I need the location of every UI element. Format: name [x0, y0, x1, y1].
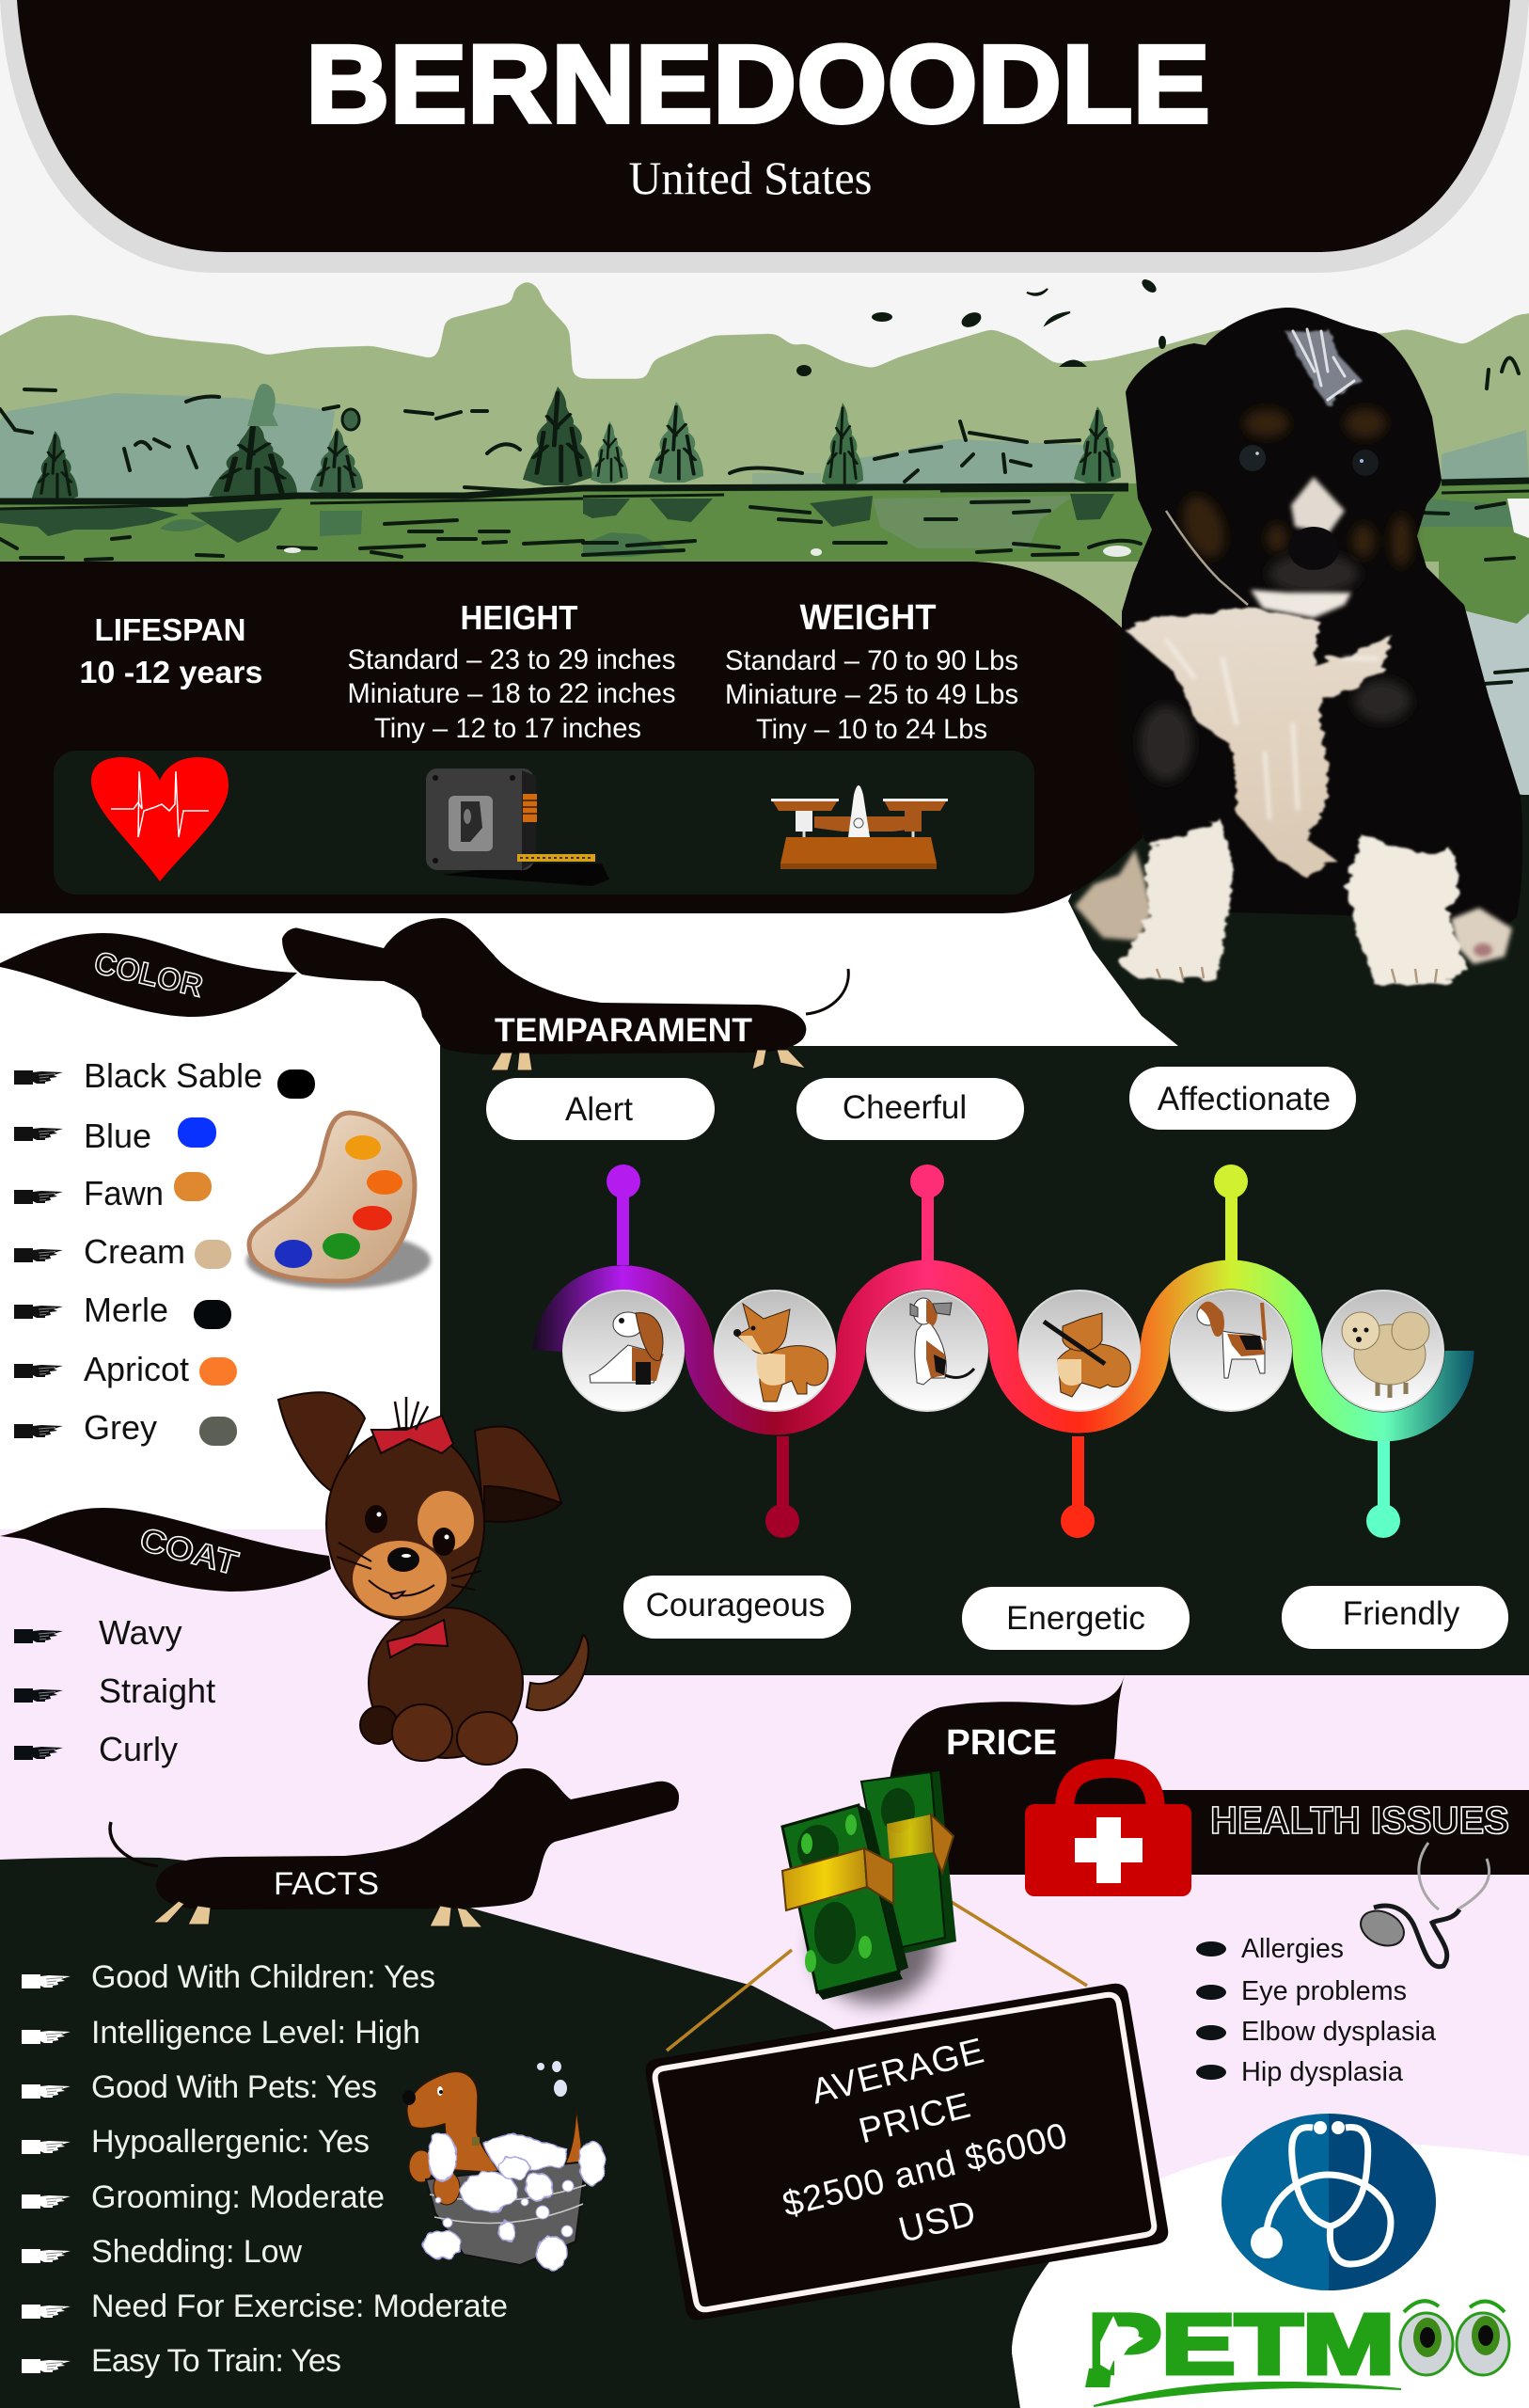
dark green ground: temperament panel [440, 752, 1529, 1675]
weight text [725, 598, 1018, 745]
price banner and health issues band [887, 1674, 1529, 1875]
health issues list: Eye problems [1241, 1976, 1407, 2006]
weight text: Standard – 70 to 90 Lbs [725, 645, 1018, 676]
trait pills: Courageous [646, 1587, 825, 1624]
pink lower background [0, 1529, 1529, 2182]
lifespan text [79, 612, 263, 689]
color list: Grey [84, 1408, 157, 1447]
dark green facts ground [0, 1858, 1166, 2408]
health issues heading: HEALTH ISSUES [1210, 1798, 1509, 1842]
temperament wave chart [547, 1164, 1459, 1538]
dark info panel [0, 562, 1143, 913]
header banner [0, 0, 1529, 273]
facts list: Intelligence Level: High [91, 2015, 420, 2051]
trait pills: Affectionate [1158, 1081, 1331, 1117]
temperament heading: dog banner [282, 918, 848, 1070]
color banner [0, 933, 297, 1017]
color list: Cream [84, 1232, 185, 1271]
facts list: Shedding: Low [91, 2234, 302, 2270]
disc: corgi [715, 1291, 835, 1411]
color list: Merle [84, 1291, 168, 1329]
color list [14, 1056, 315, 1447]
landscape illustration [0, 277, 1529, 795]
disc: basset hound [563, 1291, 684, 1411]
coat list [14, 1613, 215, 1768]
top stems and pins [607, 1164, 1248, 1265]
disc: standing beagle [867, 1291, 987, 1411]
facts list: Need For Exercise: Moderate [91, 2289, 508, 2324]
health issues list: Hip dysplasia [1241, 2057, 1404, 2087]
white bottom-right area [1012, 2142, 1529, 2408]
coat list: Straight [99, 1671, 215, 1710]
price sign text: USD [895, 2194, 981, 2251]
price sign text: AVERAGE [808, 2031, 988, 2112]
health issues list [1196, 1934, 1437, 2087]
height text: Miniature – 18 to 22 inches [348, 678, 675, 709]
price sign text [779, 2031, 1072, 2251]
temperament heading text: TEMPARAMENT [495, 1012, 752, 1049]
trait pills [486, 1067, 1508, 1650]
coat banner [0, 1508, 331, 1592]
facts list [22, 1959, 508, 2379]
bernedoodle puppy photo illustration [1075, 308, 1522, 986]
color list: Fawn [84, 1174, 164, 1212]
color list: Blue [84, 1117, 151, 1155]
coat heading: COAT [136, 1521, 242, 1582]
cartoon brown puppy [278, 1392, 589, 1765]
icon: small stethoscope [1355, 1843, 1490, 1967]
trait pills: Energetic [1006, 1600, 1145, 1637]
color heading: COLOR [91, 944, 206, 1004]
PETMOO logo [1085, 2298, 1509, 2406]
weight text: Miniature – 25 to 49 Lbs [725, 679, 1018, 710]
PETMOO logo: PETM [1088, 2298, 1395, 2392]
icon: medical bag [1025, 1768, 1191, 1896]
lifespan text: LIFESPAN [94, 612, 246, 647]
price heading: PRICE [946, 1723, 1057, 1763]
disc: corgi with stick [1019, 1291, 1140, 1411]
trait pills: Friendly [1343, 1595, 1460, 1632]
height text: HEIGHT [461, 598, 577, 637]
bottom stems and pins [765, 1436, 1400, 1538]
weight text: Tiny – 10 to 24 Lbs [756, 714, 987, 745]
title: BERNEDOODLE [306, 23, 1210, 147]
icon: money stacks [782, 1771, 956, 2004]
height text [348, 598, 675, 744]
gradient ribbon [547, 1275, 1459, 1427]
price sign [647, 1985, 1167, 2320]
subtitle: United States [628, 151, 873, 204]
price sign text: $2500 and $6000 [779, 2115, 1072, 2225]
coat list: Wavy [99, 1613, 182, 1652]
facts heading: dog banner [110, 1768, 679, 1927]
coat list: Curly [99, 1730, 178, 1768]
icon: blue stethoscope badge [1222, 2114, 1436, 2290]
trait pills: Alert [565, 1091, 633, 1128]
disc: pomeranian [1323, 1291, 1443, 1411]
icon: weighing scale [771, 785, 948, 869]
facts list: Grooming: Moderate [91, 2179, 385, 2215]
ropes [667, 1896, 1087, 2051]
facts list: Good With Children: Yes [91, 1959, 435, 1995]
price sign text: PRICE [855, 2085, 975, 2151]
height text: Standard – 23 to 29 inches [348, 644, 675, 675]
health issues list: Elbow dysplasia [1241, 2017, 1437, 2047]
facts list: Good With Pets: Yes [91, 2069, 377, 2105]
health issues list: Allergies [1241, 1934, 1344, 1964]
icon: tape measure [426, 768, 609, 886]
facts heading text: FACTS [274, 1866, 379, 1902]
color list: Apricot [84, 1350, 189, 1388]
sky [0, 0, 1529, 564]
trait pills: Cheerful [843, 1089, 967, 1126]
facts list: Hypoallergenic: Yes [91, 2124, 370, 2160]
icon: heart [91, 757, 229, 881]
color list: Black Sable [84, 1056, 262, 1095]
trees [32, 384, 1121, 502]
facts list: Easy To Train: Yes [91, 2343, 341, 2379]
icon: paint palette [246, 1113, 431, 1289]
weight text: WEIGHT [799, 598, 937, 638]
icon strip [54, 751, 1034, 895]
lifespan text: 10 -12 years [79, 655, 263, 689]
disc: beagle side view [1171, 1291, 1291, 1411]
height text: Tiny – 12 to 17 inches [374, 713, 641, 744]
icon: dog in bath tub [402, 2061, 606, 2270]
